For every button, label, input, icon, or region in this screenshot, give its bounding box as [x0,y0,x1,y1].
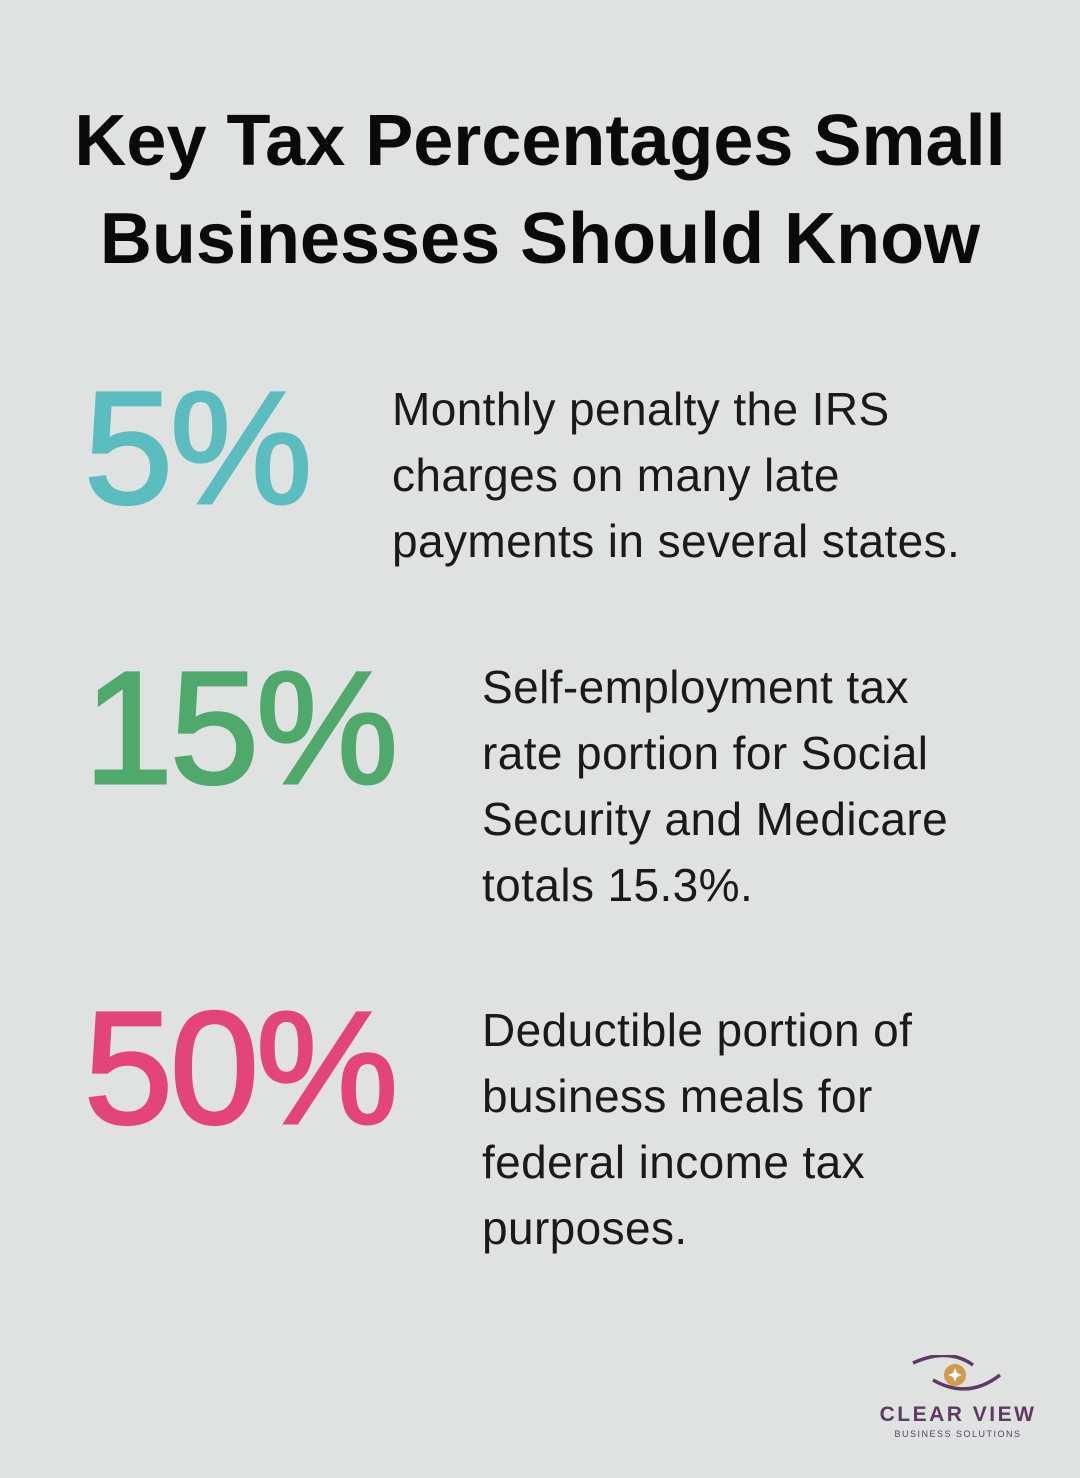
text: 50% description: purposes. [482,1202,688,1254]
text: 50% description: Deductible portion of [482,1004,912,1056]
logo text: CLEAR VIEW [880,1403,1036,1426]
text: 15% description: totals 15.3%. [482,859,753,911]
text: 50% description [482,1004,912,1254]
title: Key Tax Percentages Small [74,101,1006,181]
text: 5% description: payments in several states. [392,515,960,567]
stat: 5% [84,358,960,567]
stat: 15% [84,638,948,911]
text: 5% description [392,383,960,567]
text: 5% description: charges on many late [392,449,840,501]
icon: eye [912,1355,1001,1391]
text: 5% description: Monthly penalty the IRS [392,383,890,435]
logo: Clear View [880,1355,1036,1439]
number: 15%: 15% [84,638,395,817]
title: Businesses Should Know [100,199,980,279]
number: 50%: 50% [84,978,395,1157]
title [74,101,1006,279]
stat: 50% [84,978,912,1254]
text: 15% description [482,661,948,911]
text: 50% description: federal income tax [482,1136,865,1188]
text: 50% description: business meals for [482,1070,873,1122]
logo text [880,1403,1036,1439]
number: 5%: 5% [84,358,309,537]
logo text: BUSINESS SOLUTIONS [894,1429,1022,1439]
text: 15% description: rate portion for Social [482,727,928,779]
text: 15% description: Security and Medicare [482,793,948,845]
text: 15% description: Self-employment tax [482,661,909,713]
